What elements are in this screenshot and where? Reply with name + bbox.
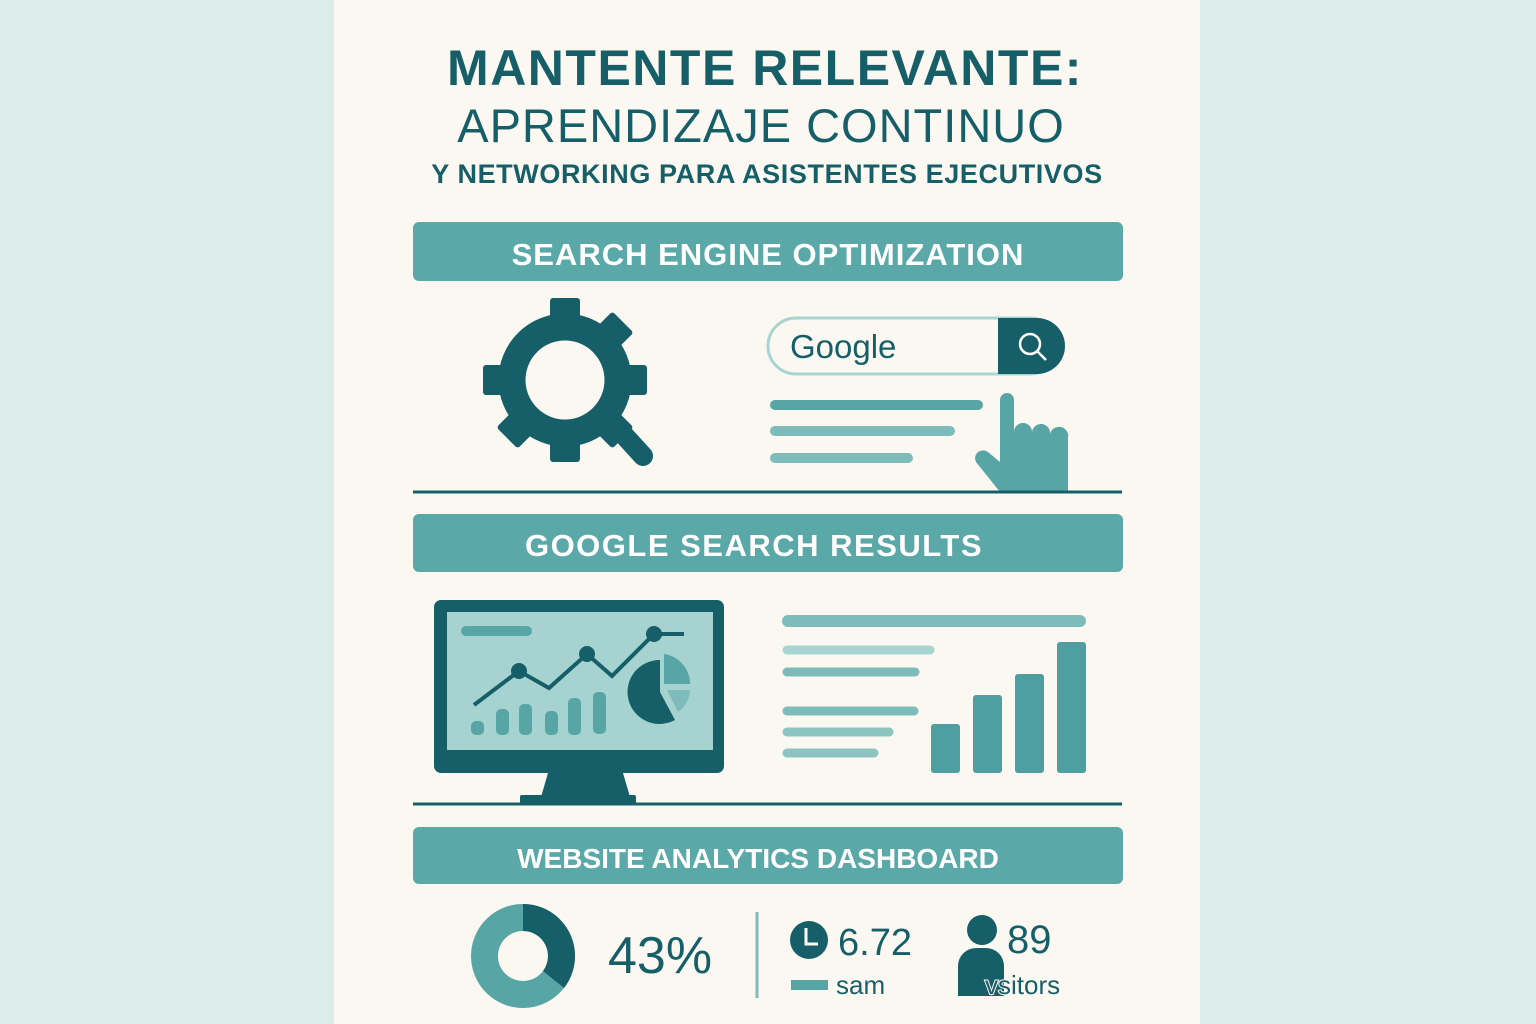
stat: time 6.72: 6.72	[838, 922, 912, 964]
stat: visitors 89	[958, 915, 1060, 1000]
banner: search engine optimization: SEARCH ENGINE OPTIMIZATION	[512, 237, 1024, 272]
search bar: Google	[790, 328, 896, 365]
stat: visitors 89: 89	[1007, 918, 1052, 962]
icon: monitor dashboard	[434, 600, 724, 805]
panel: main page	[334, 0, 1200, 1024]
title: MANTENTE RELEVANTE:	[447, 40, 1083, 96]
title: Y NETWORKING PARA ASISTENTES EJECUTIVOS	[431, 159, 1103, 189]
stat: time 6.72: sam	[836, 970, 885, 1000]
title	[431, 40, 1103, 189]
search bar	[768, 318, 1065, 374]
banner: google search results	[413, 514, 1123, 572]
banner: search engine optimization	[413, 222, 1123, 281]
result lines	[775, 405, 978, 458]
stat: visitors 89: vsitors	[985, 970, 1060, 1000]
donut chart 43%: 43%	[608, 927, 712, 985]
title: APRENDIZAJE CONTINUO	[457, 99, 1065, 152]
icon: gear with magnifier	[483, 298, 647, 462]
result lines and bar chart	[787, 621, 1086, 773]
banner: website analytics dashboard: WEBSITE ANALYTICS DASHBOARD	[517, 843, 999, 874]
stat: time 6.72	[790, 921, 912, 1000]
donut chart 43%	[484, 904, 712, 994]
icon: pointing hand	[975, 393, 1068, 492]
banner: google search results: GOOGLE SEARCH RESULTS	[525, 528, 983, 563]
banner: website analytics dashboard	[413, 827, 1123, 884]
